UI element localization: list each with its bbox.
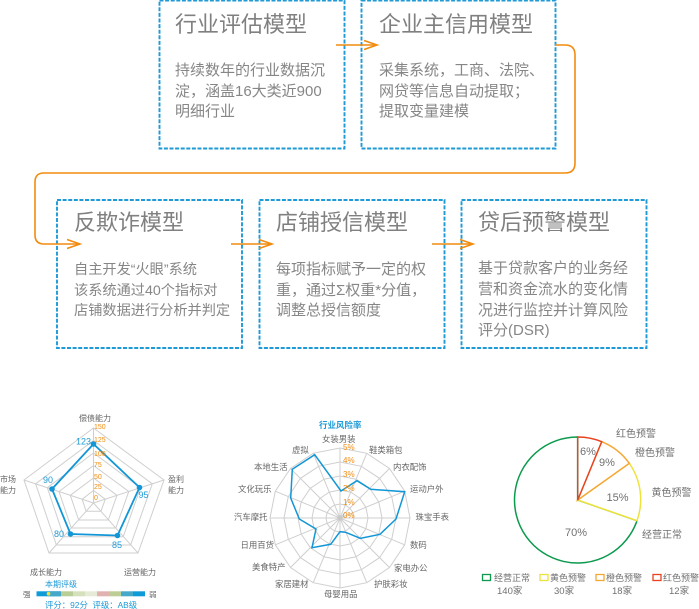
radar axis labels: 成长能力 [30, 567, 62, 577]
radar title: 行业风险率 [319, 420, 362, 430]
radar values: 95 [138, 490, 149, 500]
chart: 行业风险率雷达图 [234, 420, 450, 599]
radar category labels: 数码 [410, 540, 427, 550]
radar axis labels: 运营能力 [124, 567, 156, 577]
pie legend: 黄色预警 [550, 572, 586, 583]
radar scale numbers: 100 [94, 451, 106, 458]
pie legend: 140家 [497, 585, 523, 597]
pie percentages: 9% [599, 457, 615, 469]
radar category labels: 内衣配饰 [393, 462, 426, 472]
panel: 反欺诈模型: 自主开发“火眼”系统 [74, 262, 197, 278]
radar category labels: 女装男装 [322, 434, 356, 444]
pie labels: 黄色预警 [652, 486, 692, 499]
radar category labels: 鞋类箱包 [369, 445, 403, 455]
slice: 黄色预警 [578, 463, 641, 521]
pie labels: 红色预警 [616, 427, 656, 440]
panel: 行业评估模型: 明细行业 [175, 103, 235, 120]
radar scale numbers: 50 [94, 474, 102, 481]
panel: 贷后预警模型: 营和资金流水的变化情 [478, 281, 628, 298]
radar category labels: 美食特产 [252, 562, 286, 572]
pie legend: 30家 [554, 585, 575, 597]
panel: 贷后预警模型 [462, 200, 646, 348]
radar category labels: 珠宝手表 [416, 512, 450, 522]
radar scale numbers: 0 [94, 495, 98, 502]
chart: 能力雷达图 [0, 413, 184, 577]
radar scale numbers: 75 [94, 462, 102, 469]
radar values: 90 [43, 475, 53, 485]
radar scale numbers [94, 424, 106, 502]
radar category labels: 本地生活 [254, 462, 288, 472]
panel: 反欺诈模型 [57, 200, 242, 348]
radar category labels: 母婴用品 [324, 589, 358, 599]
radar values: 123 [76, 436, 91, 446]
slice: 经营正常 [514, 437, 637, 563]
arrow: 企业主信用 to 反欺诈 [35, 45, 575, 248]
rating legend: 本期评级 [45, 579, 77, 589]
panel: 企业主信用模型 [362, 0, 556, 148]
radar data points [49, 441, 142, 538]
radar category labels: 汽车摩托 [234, 512, 268, 522]
radar category labels: 家居建材 [275, 579, 309, 589]
panel: 行业评估模型 [160, 0, 344, 148]
radar category labels: 日用百货 [240, 540, 274, 550]
arrow: 店铺授信 to 贷后预警 [432, 240, 473, 248]
panel: 行业评估模型: 淀，涵盖16大类近900 [175, 83, 322, 100]
panel: 反欺诈模型: 该系统通过40个指标对 [74, 283, 217, 299]
radar values [43, 436, 149, 550]
panel: 行业评估模型: 行业评估模型 [175, 12, 307, 37]
pie percentages: 6% [580, 446, 596, 458]
pie legend: 经营正常 [494, 572, 530, 583]
pie legend: 12家 [669, 585, 690, 597]
panel: 企业主信用模型: 提取变量建模 [379, 103, 469, 120]
radar axis labels: 市场 [0, 474, 16, 484]
radar axis labels: 能力 [168, 485, 184, 495]
radar category labels: 文化玩乐 [238, 484, 272, 494]
panel: 行业评估模型: 持续数年的行业数据沉 [175, 62, 325, 79]
panel: 反欺诈模型: 店铺数据进行分析并判定 [74, 303, 230, 319]
panel: 企业主信用模型: 网贷等信息自动提取； [379, 82, 529, 100]
pie percentages: 70% [565, 527, 587, 539]
radar category labels: 护肤彩妆 [374, 579, 408, 589]
panel: 店铺授信模型: 每项指标赋予一定的权 [276, 261, 426, 278]
rating legend: 强 [23, 590, 31, 599]
arrow: 行业评估 to 企业主信用 [336, 40, 377, 50]
panel: 企业主信用模型: 采集系统，工商、法院、 [379, 61, 544, 79]
radar percent scale [343, 443, 355, 520]
radar center [338, 516, 342, 520]
radar values: 80 [54, 529, 64, 539]
radar percent scale: 2% [343, 484, 355, 493]
chart: 预警分布饼图 [514, 427, 692, 563]
panel: 贷后预警模型: 贷后预警模型 [478, 210, 610, 235]
panel: 企业主信用模型: 企业主信用模型 [379, 12, 533, 37]
panel: 贷后预警模型: 况进行监控并计算风险 [478, 301, 628, 319]
radar axis labels: 盈利 [168, 474, 184, 484]
rating legend: 弱 [149, 590, 156, 599]
radar axis labels: 偿债能力 [79, 413, 111, 423]
slice edge [577, 437, 579, 500]
pie labels [616, 427, 692, 541]
radar scale numbers: 150 [94, 424, 106, 431]
radar scale numbers: 125 [94, 437, 106, 444]
pie legend: 18家 [612, 585, 633, 597]
radar percent scale: 3% [343, 470, 355, 479]
pie legend: 橙色预警 [606, 572, 642, 583]
radar category labels: 虚拟 [292, 445, 309, 455]
radar data line [52, 444, 140, 536]
pie percentages: 15% [606, 492, 629, 504]
panel: 贷后预警模型: 评分(DSR) [478, 322, 550, 339]
radar scale numbers: 25 [94, 484, 102, 491]
radar category labels [234, 434, 450, 599]
panel: 店铺授信模型: 店铺授信模型 [276, 210, 408, 235]
panel: 反欺诈模型: 反欺诈模型 [74, 210, 184, 235]
rating legend [23, 579, 156, 609]
radar percent scale: 0% [343, 511, 355, 520]
radar axis labels [0, 413, 184, 577]
panel: 店铺授信模型 [260, 200, 444, 348]
slice: 橙色预警 [578, 442, 629, 500]
radar percent scale: 5% [343, 443, 355, 452]
radar percent scale: 4% [343, 456, 355, 465]
radar category labels: 运动户外 [410, 484, 444, 494]
radar category labels: 家电办公 [394, 563, 428, 573]
pie percentages [565, 446, 629, 539]
radar values: 85 [112, 540, 122, 550]
pie labels: 经营正常 [642, 528, 682, 541]
arrow: 反欺诈 to 店铺授信 [231, 240, 272, 248]
radar axis labels: 能力 [0, 485, 16, 495]
slice: 红色预警 [578, 437, 602, 500]
radar data line [291, 455, 405, 548]
pie legend [482, 572, 699, 597]
panel: 店铺授信模型: 调整总授信额度 [276, 302, 381, 319]
pie labels: 橙色预警 [635, 446, 675, 459]
pie legend: 红色预警 [663, 572, 699, 583]
panel: 店铺授信模型: 重，通过Σ权重*分值， [276, 282, 426, 299]
panel: 贷后预警模型: 基于贷款客户的业务经 [478, 260, 628, 277]
radar percent scale: 1% [343, 498, 355, 507]
